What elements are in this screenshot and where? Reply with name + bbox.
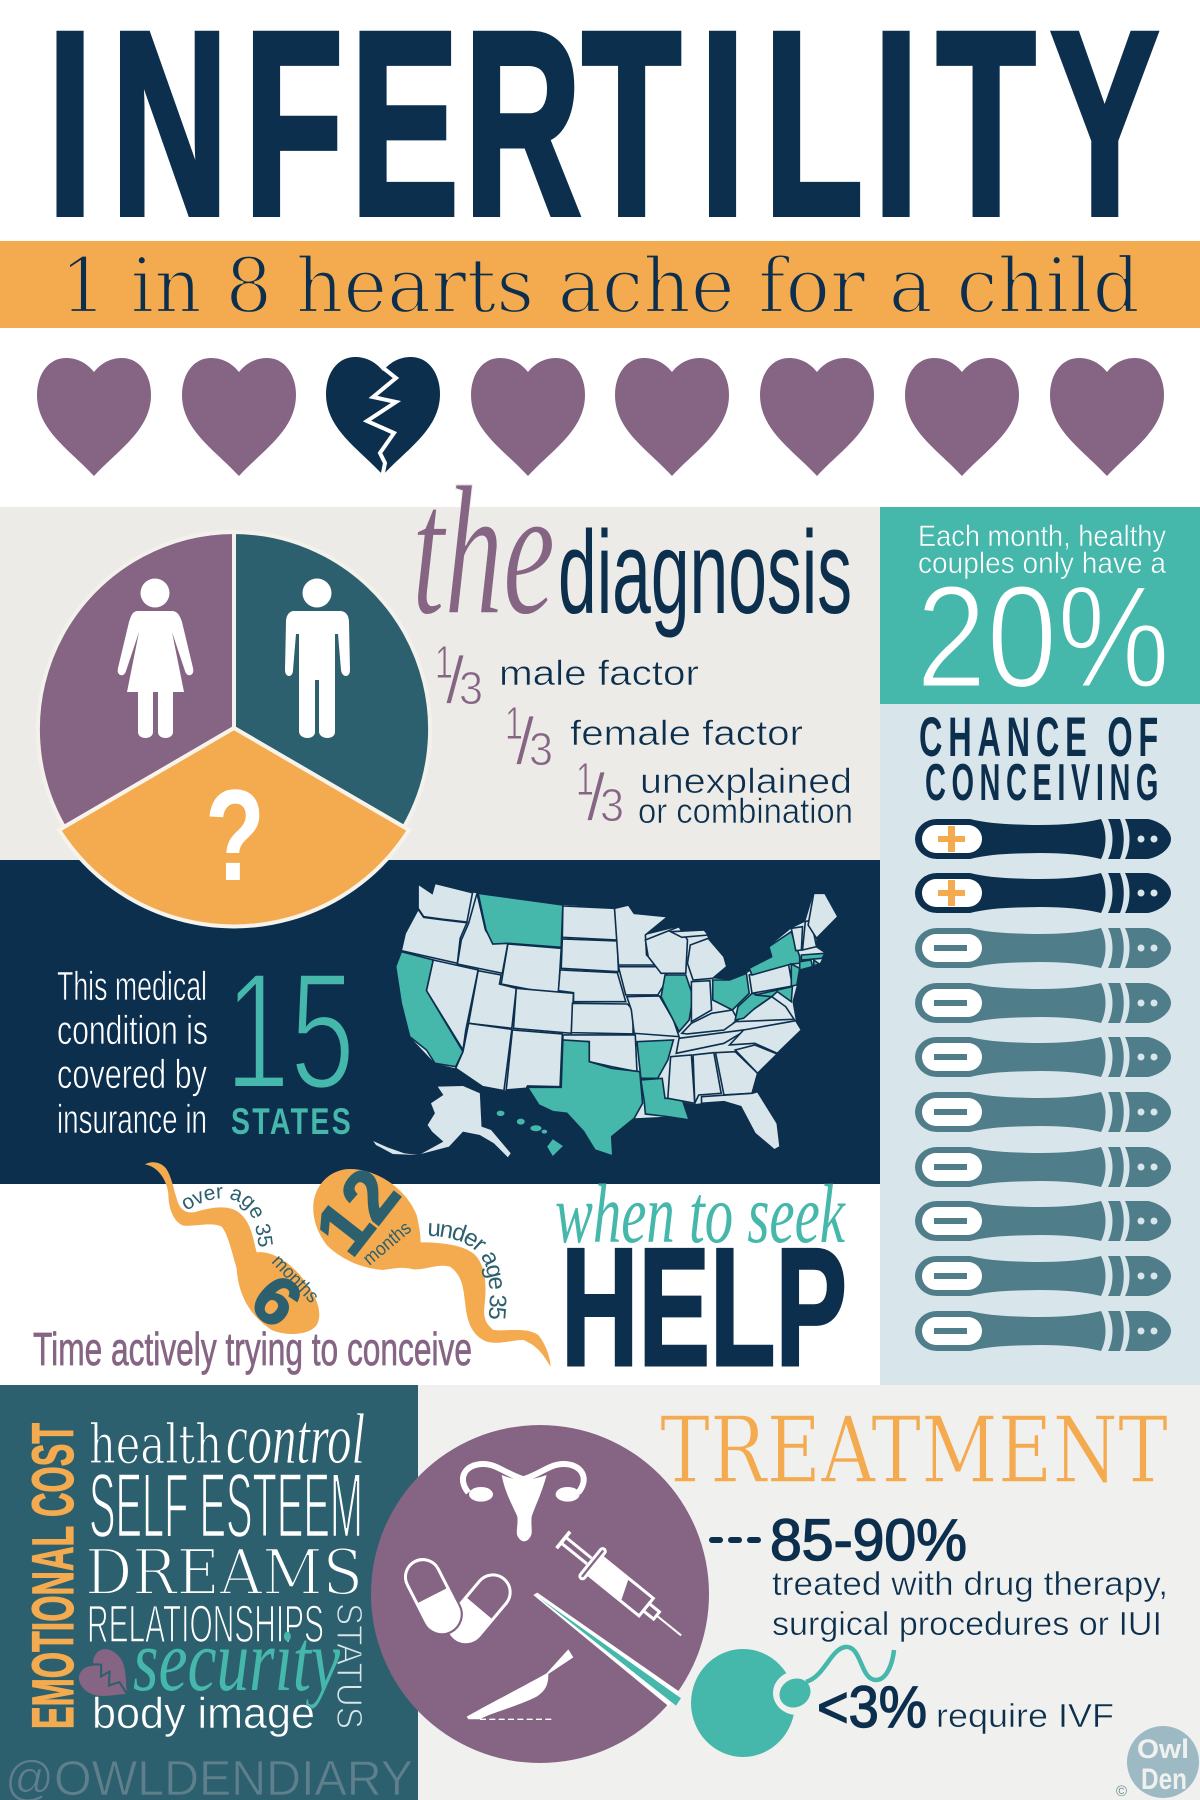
heading: when to seek help: when to seek bbox=[555, 1168, 846, 1261]
word cloud: emotional costs bbox=[74, 1399, 370, 1738]
text: one third unexplained or combination: unexplained bbox=[640, 762, 852, 801]
panel: emotional cost background bbox=[0, 1385, 418, 1800]
stat: under 3 percent require IVF bbox=[817, 1675, 1114, 1740]
icon: broken heart bbox=[326, 357, 440, 478]
word cloud: emotional costs: RELATIONSHIPS bbox=[87, 1595, 324, 1654]
stat: under 3 percent require IVF: require IVF bbox=[936, 1697, 1114, 1734]
logo: owl den: Den bbox=[1141, 1763, 1187, 1796]
icon: uterus bbox=[463, 1464, 584, 1541]
text: one third male factor: 1 bbox=[435, 636, 453, 688]
icon: negative test bbox=[915, 1256, 1171, 1296]
treatment icon circle bbox=[371, 1425, 709, 1763]
banner: 1 in 8 hearts: 1 in 8 hearts ache for a child bbox=[60, 241, 1140, 330]
text: each month healthy couples: couples only have a bbox=[918, 547, 1166, 580]
word cloud: emotional costs: security bbox=[133, 1613, 341, 1710]
panel: insurance background bbox=[0, 860, 880, 1184]
panel: diagnosis background bbox=[0, 507, 880, 860]
text: each month healthy couples bbox=[918, 520, 1166, 580]
stat: 15 states: 15 bbox=[225, 939, 355, 1124]
heading: chance of conceiving bbox=[919, 705, 1164, 812]
icon: question mark: ? bbox=[205, 762, 265, 908]
icon: negative test bbox=[915, 1311, 1171, 1351]
text: each month healthy couples: Each month, healthy bbox=[918, 520, 1166, 553]
icon: small broken heart bbox=[74, 1644, 142, 1712]
icon: negative test bbox=[915, 1092, 1171, 1132]
heading: the diagnosis: the bbox=[412, 449, 555, 654]
map: United States coverage bbox=[373, 883, 838, 1157]
logo: owl den: Owl bbox=[1137, 1734, 1189, 1764]
text: one third female factor: 1 bbox=[505, 697, 523, 749]
icon: egg and sperm bbox=[691, 1647, 894, 1757]
text: insurance coverage: insurance in bbox=[57, 1096, 207, 1142]
stat: under 3 percent require IVF: <3% bbox=[817, 1675, 927, 1740]
text: SELF ESTEEM bbox=[89, 1455, 363, 1557]
icon: negative test bbox=[915, 1037, 1171, 1077]
icon: positive test bbox=[915, 819, 1171, 859]
map: Hawaii bbox=[497, 1111, 563, 1156]
word cloud: emotional costs: DREAMS bbox=[85, 1536, 363, 1609]
curved label: under age 35: under age 35 bbox=[428, 1223, 506, 1319]
text: insurance coverage: This medical bbox=[57, 963, 207, 1009]
text: insurance coverage: covered by bbox=[57, 1051, 207, 1097]
sperm: 12 months under age 35: months bbox=[359, 1218, 416, 1270]
curved label: over age 35: over age 35 bbox=[182, 1187, 273, 1246]
pregnancy tests: 2 of 10 positive bbox=[915, 819, 1171, 1351]
caption: time actively trying to conceive: Time actively trying to conceive bbox=[33, 1323, 472, 1375]
map: Alaska bbox=[373, 1086, 511, 1157]
word cloud: emotional costs: STATUS bbox=[329, 1603, 370, 1729]
text: one third unexplained or combination: 1 bbox=[576, 753, 594, 805]
text: one third female factor bbox=[505, 697, 803, 778]
text: insurance coverage bbox=[57, 963, 208, 1142]
icon: capsules bbox=[399, 1554, 517, 1649]
text: one third male factor: 3 bbox=[459, 662, 483, 714]
text: one third male factor bbox=[435, 636, 699, 717]
icon: man bbox=[285, 578, 350, 738]
icon: scalpel bbox=[467, 1649, 573, 1719]
hearts row bbox=[37, 357, 1164, 478]
text: insurance coverage: condition is bbox=[57, 1007, 208, 1053]
stat: 15 states: STATES bbox=[231, 1101, 353, 1142]
text: one third female factor: / bbox=[516, 704, 535, 778]
sperm: 12 months under age 35 bbox=[299, 1153, 551, 1366]
icon: positive test bbox=[915, 873, 1171, 913]
stat: 20 percent: 20% bbox=[916, 555, 1170, 718]
text: one third female factor: 3 bbox=[529, 723, 553, 775]
text: one third unexplained or combination: 3 bbox=[600, 779, 624, 831]
stat: 85-90 percent bbox=[709, 1508, 1168, 1642]
icon: negative test bbox=[915, 928, 1171, 968]
text: one third unexplained or combination: or combination bbox=[638, 792, 853, 831]
logo: owl den bbox=[1116, 1726, 1199, 1800]
word cloud: emotional costs: health bbox=[89, 1413, 222, 1476]
text: one third female factor: female factor bbox=[570, 714, 803, 753]
panel: chance of conceiving background bbox=[880, 704, 1200, 1385]
heading: when to seek help bbox=[555, 1168, 847, 1401]
stat: 15 states bbox=[225, 939, 355, 1142]
sperm: 6 months over age 35: months bbox=[267, 1251, 323, 1307]
word cloud: emotional costs: control bbox=[226, 1399, 365, 1479]
text: one third male factor: male factor bbox=[499, 654, 699, 693]
icon: catheter bbox=[533, 1593, 681, 1706]
stat: 85-90 percent: surgical procedures or IUI bbox=[772, 1605, 1162, 1642]
heading: when to seek help: HELP bbox=[561, 1213, 847, 1401]
icon: negative test bbox=[915, 983, 1171, 1023]
logo: owl den: © bbox=[1116, 1783, 1127, 1800]
heading: the diagnosis: diagnosis bbox=[558, 507, 852, 639]
word cloud: emotional costs: body image bbox=[92, 1689, 315, 1738]
icon: negative test bbox=[915, 1201, 1171, 1241]
stat: 85-90 percent: treated with drug therapy, bbox=[772, 1565, 1168, 1602]
icon: negative test bbox=[915, 1147, 1171, 1187]
sperm: 12 months under age 35: 12 bbox=[299, 1153, 415, 1269]
panel: 20 percent background bbox=[880, 507, 1200, 704]
stat: 85-90 percent: 85-90% bbox=[770, 1508, 967, 1573]
icon: woman bbox=[118, 578, 193, 738]
sperm: 6 months over age 35 bbox=[145, 1162, 323, 1342]
sperm: 6 months over age 35: 6 bbox=[237, 1260, 316, 1342]
heading: emotional cost: EMOTIONAL COST bbox=[21, 1423, 86, 1729]
text: one third male factor: / bbox=[446, 643, 465, 717]
pie chart: diagnosis bbox=[38, 532, 430, 926]
text: one third unexplained or combination bbox=[576, 753, 853, 834]
text: one third unexplained or combination: / bbox=[587, 760, 606, 834]
icon: syringe bbox=[552, 1525, 693, 1650]
panel: treatment background bbox=[418, 1385, 1200, 1800]
heading: the diagnosis bbox=[412, 449, 852, 654]
